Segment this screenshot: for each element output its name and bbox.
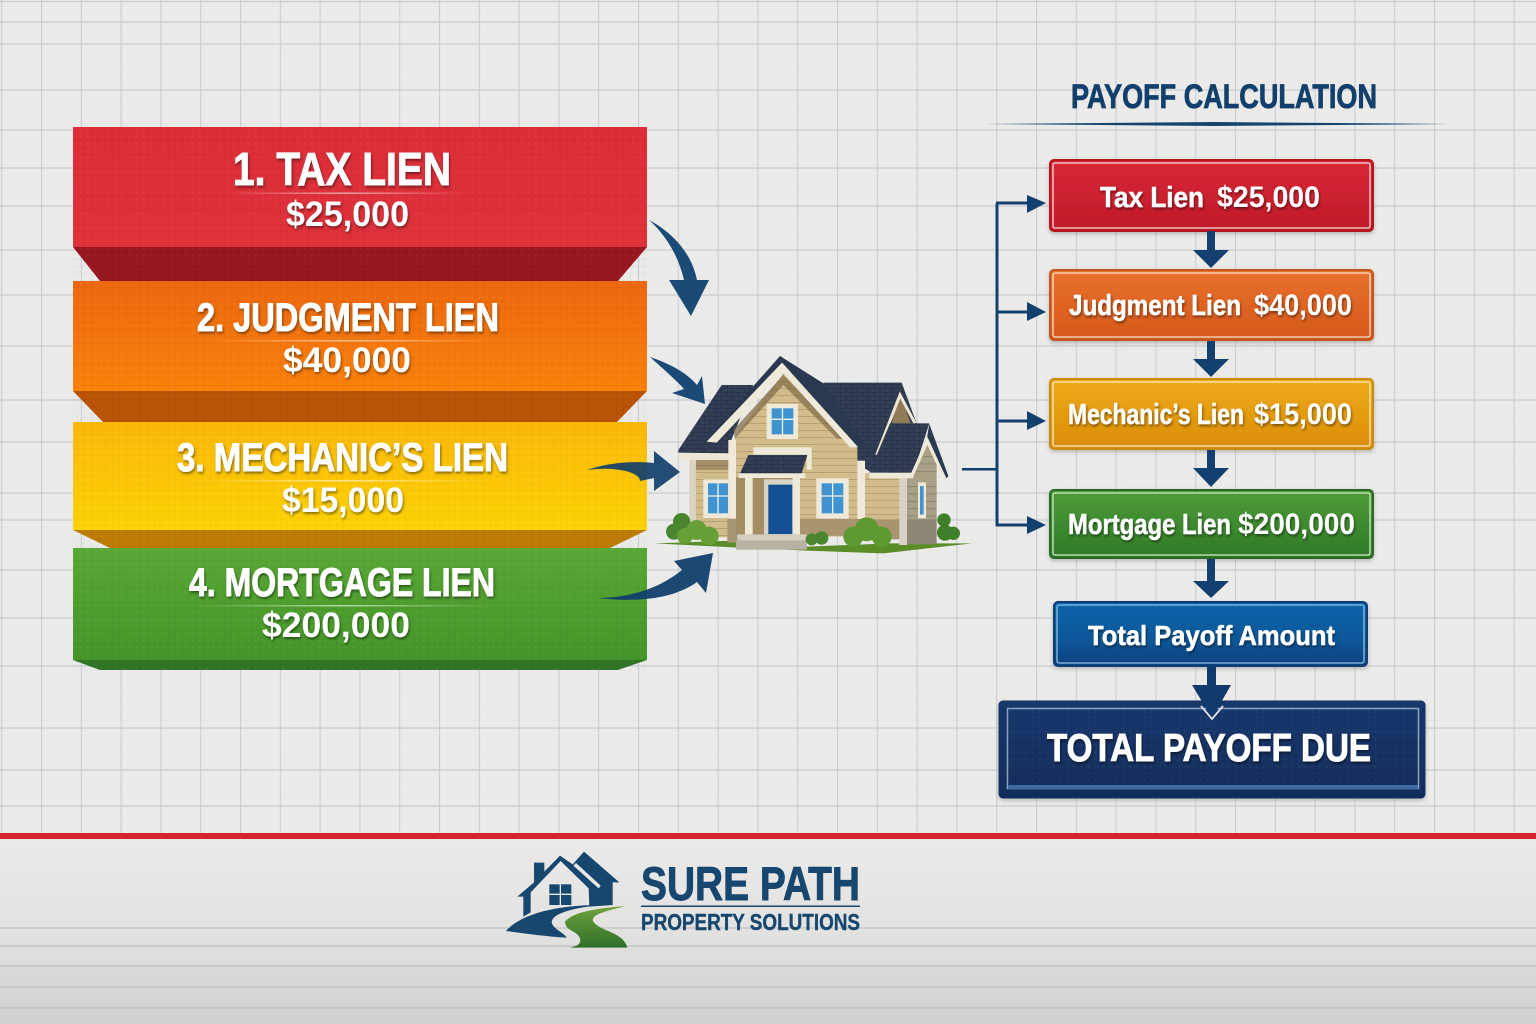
arrow down 4 [1193,559,1229,598]
flow box: tax lien [1050,160,1373,231]
flow box: mortgage lien [1050,490,1373,558]
arrow down 1 [1193,231,1229,268]
arrow down 2 [1193,341,1229,377]
panel: lien stack [73,127,647,670]
arrow down 3 [1193,450,1229,487]
heading: payoff calculation: PAYOFF CALCULATION [1071,78,1377,116]
tier 1: tax lien [73,127,647,281]
tier 1: tax lien: $25,000 [286,195,409,234]
flow box: tax lien: $25,000 [1217,181,1320,214]
tier 3: mechanic's lien: 3. MECHANIC’S LIEN [177,436,508,480]
flow box: total payoff amount: Total Payoff Amount [1088,620,1335,651]
tier 4: mortgage lien: 4. MORTGAGE LIEN [189,561,495,605]
flow box: total payoff due [999,701,1425,798]
tier 3: mechanic's lien [73,422,647,548]
flow box: judgment lien [1050,270,1373,340]
flow box: mechanic's lien: $15,000 [1254,398,1352,431]
footer band [0,833,1536,1024]
arrow: judgment lien to house [650,357,705,404]
payoff connector tree with arrows [996,195,1046,534]
tier 2: judgment lien: 2. JUDGMENT LIEN [197,296,499,340]
icon: logo house and path [506,852,627,948]
flow box: mortgage lien: Mortgage Lien [1068,509,1231,541]
arrow: mortgage lien to house [597,553,713,600]
arrow: mechanic's lien to house [587,451,680,491]
arrow down 5 into total due [1192,667,1231,719]
tier 4: mortgage lien: $200,000 [262,606,410,645]
logo: Sure Path Property Solutions [506,852,860,948]
tier 3: mechanic's lien: $15,000 [282,481,404,520]
flow box: mechanic's lien: Mechanic’s Lien [1068,399,1244,431]
tier 2: judgment lien: $40,000 [283,341,411,380]
tier 4: mortgage lien [73,548,647,670]
flow box: tax lien: Tax Lien [1100,182,1204,214]
logo divider [641,906,860,907]
logo wordmark: SURE PATH [641,857,860,910]
flow box: judgment lien: $40,000 [1254,289,1352,322]
flow box: mechanic's lien [1050,379,1373,449]
flow box: total payoff amount [1054,602,1367,666]
tier 2: judgment lien [73,281,647,422]
flow box: judgment lien: Judgment Lien [1069,290,1241,322]
flow box: total payoff due: TOTAL PAYOFF DUE [1047,727,1371,770]
stub connector from house [962,468,998,470]
arrow: tax lien to house [649,220,709,316]
logo tagline: PROPERTY SOLUTIONS [641,909,860,935]
tier 1: tax lien: 1. TAX LIEN [233,143,451,195]
flow box: mortgage lien: $200,000 [1238,508,1355,541]
icon: house illustration [655,356,972,553]
heading underline [985,122,1450,126]
